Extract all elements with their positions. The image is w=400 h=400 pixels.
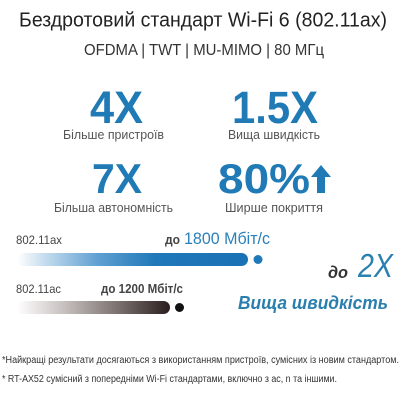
stat: 4X more devices: 4X <box>90 82 143 133</box>
stat: 1.5X higher speed: Вища швидкість <box>228 127 320 142</box>
stat: 4X more devices <box>63 82 164 142</box>
speed bar: 802.11ac <box>16 282 184 314</box>
speed bar: 802.11ax: 802.11ax <box>16 233 62 247</box>
speed bar: 802.11ax: 1800 Мбіт/с <box>184 230 270 248</box>
callout: up to 2X <box>328 247 395 284</box>
stat: 7X battery life <box>54 155 173 215</box>
stat: 80% wider coverage: Ширше покриття <box>225 200 323 215</box>
subtitle: OFDMA | TWT | MU-MIMO | 80 МГц <box>84 42 324 59</box>
stat: 4X more devices: Більше пристроїв <box>63 127 164 142</box>
stat: 7X battery life: Більша автономність <box>54 200 173 215</box>
callout: up to 2X: до <box>328 264 348 282</box>
icon: up arrow <box>311 165 331 193</box>
speed bar: 802.11ac: до 1200 Мбіт/с <box>101 282 183 296</box>
speed bar: 802.11ax: до <box>165 232 180 247</box>
callout: higher speed: Вища швидкість <box>238 292 388 313</box>
stat: 7X battery life: 7X <box>92 155 142 202</box>
speed bar: 802.11ax <box>16 230 270 266</box>
stat: 80% wider coverage: 80% <box>218 155 310 202</box>
title: Бездротовий стандарт Wi-Fi 6 (802.11ax) <box>19 8 387 32</box>
callout: up to 2X: 2X <box>357 247 395 284</box>
speed bar: 802.11ac: 802.11ac <box>16 282 61 296</box>
footnote 2: * RT-AX52 сумісний з попередніми Wi-Fi стандартами, включно з ас, n та іншими. <box>2 374 337 385</box>
stat: 80% wider coverage <box>218 155 331 215</box>
stat: 1.5X higher speed: 1.5X <box>232 82 318 133</box>
